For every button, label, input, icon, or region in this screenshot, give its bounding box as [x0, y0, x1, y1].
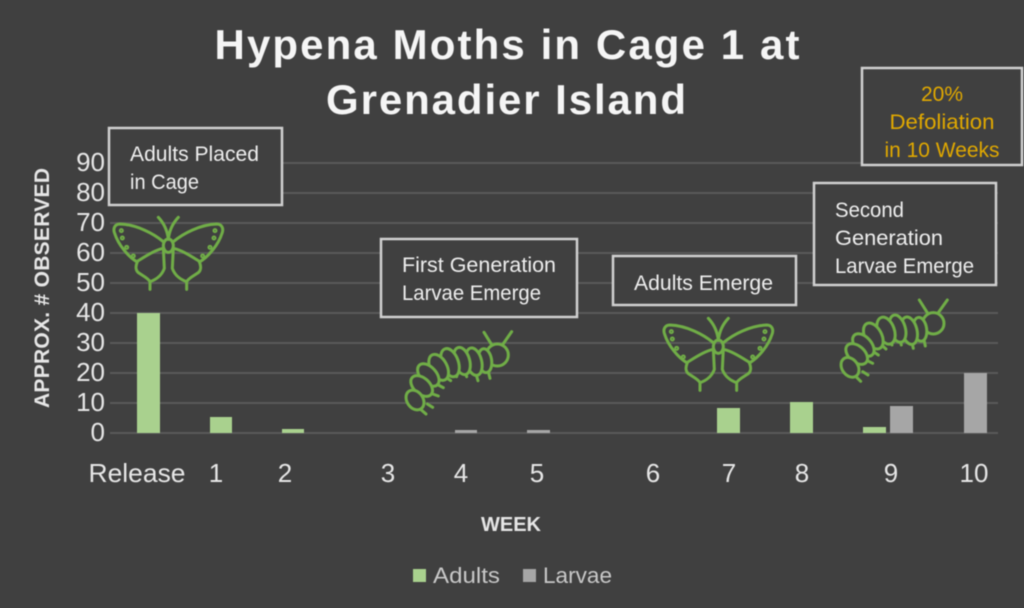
callout: first generation: [381, 239, 577, 317]
callout: defoliation: Defoliation: [890, 111, 994, 134]
legend: Larvae: [543, 563, 612, 588]
callout: first generation: First Generation: [402, 254, 556, 277]
callout: defoliation: [862, 68, 1022, 165]
legend: Adults: [433, 563, 500, 588]
y axis tick labels: 60: [76, 237, 105, 267]
callout: second generation: [814, 183, 996, 285]
y axis tick labels: 50: [76, 267, 105, 297]
bar chart: [137, 313, 987, 433]
callout: defoliation: 20%: [921, 83, 963, 106]
x axis labels: Release: [88, 458, 186, 488]
icon: butterfly 1: [114, 217, 223, 289]
x axis labels: 7: [722, 458, 736, 488]
y axis tick labels: 70: [76, 207, 105, 237]
y axis tick labels: 30: [76, 327, 105, 357]
y axis tick labels: [76, 147, 105, 447]
icon: caterpillar 1: [402, 332, 512, 414]
y axis tick labels: 80: [76, 177, 105, 207]
x axis labels: 6: [646, 458, 660, 488]
legend: [413, 563, 612, 588]
callout: second generation: Generation: [835, 227, 943, 250]
x axis labels: 8: [795, 458, 809, 488]
icon: caterpillar 2: [837, 300, 947, 381]
x axis labels: 2: [278, 458, 292, 488]
x axis labels: 1: [209, 458, 223, 488]
title: [214, 21, 800, 123]
callout: adults emerge: [613, 256, 796, 305]
x axis labels: 3: [381, 458, 395, 488]
gridlines: [110, 163, 998, 433]
y axis tick labels: 10: [76, 387, 105, 417]
callout: second generation: Larvae Emerge: [835, 255, 974, 278]
callout: adults emerge: Adults Emerge: [634, 272, 773, 295]
y axis title: APPROX. # OBSERVED: [31, 168, 54, 408]
y axis tick labels: 90: [76, 147, 105, 177]
y axis tick labels: 40: [76, 297, 105, 327]
callout: adults placed: in Cage: [130, 171, 199, 194]
title: Hypena Moths in Cage 1 at: [214, 21, 800, 68]
y axis tick labels: 20: [76, 357, 105, 387]
x axis labels: 4: [454, 458, 468, 488]
x axis labels: 9: [884, 458, 898, 488]
icon: butterfly 2: [664, 318, 773, 390]
x axis labels: 10: [960, 458, 988, 488]
x axis title: WEEK: [481, 514, 542, 536]
y axis tick labels: 0: [91, 417, 105, 447]
callout: second generation: Second: [835, 199, 904, 222]
x axis labels: [88, 458, 988, 488]
x axis labels: 5: [530, 458, 544, 488]
callout: first generation: Larvae Emerge: [402, 282, 541, 305]
callout: adults placed: [109, 128, 282, 205]
callout: defoliation: in 10 Weeks: [884, 139, 1000, 162]
title: Grenadier Island: [326, 76, 686, 123]
callout: adults placed: Adults Placed: [130, 143, 259, 166]
